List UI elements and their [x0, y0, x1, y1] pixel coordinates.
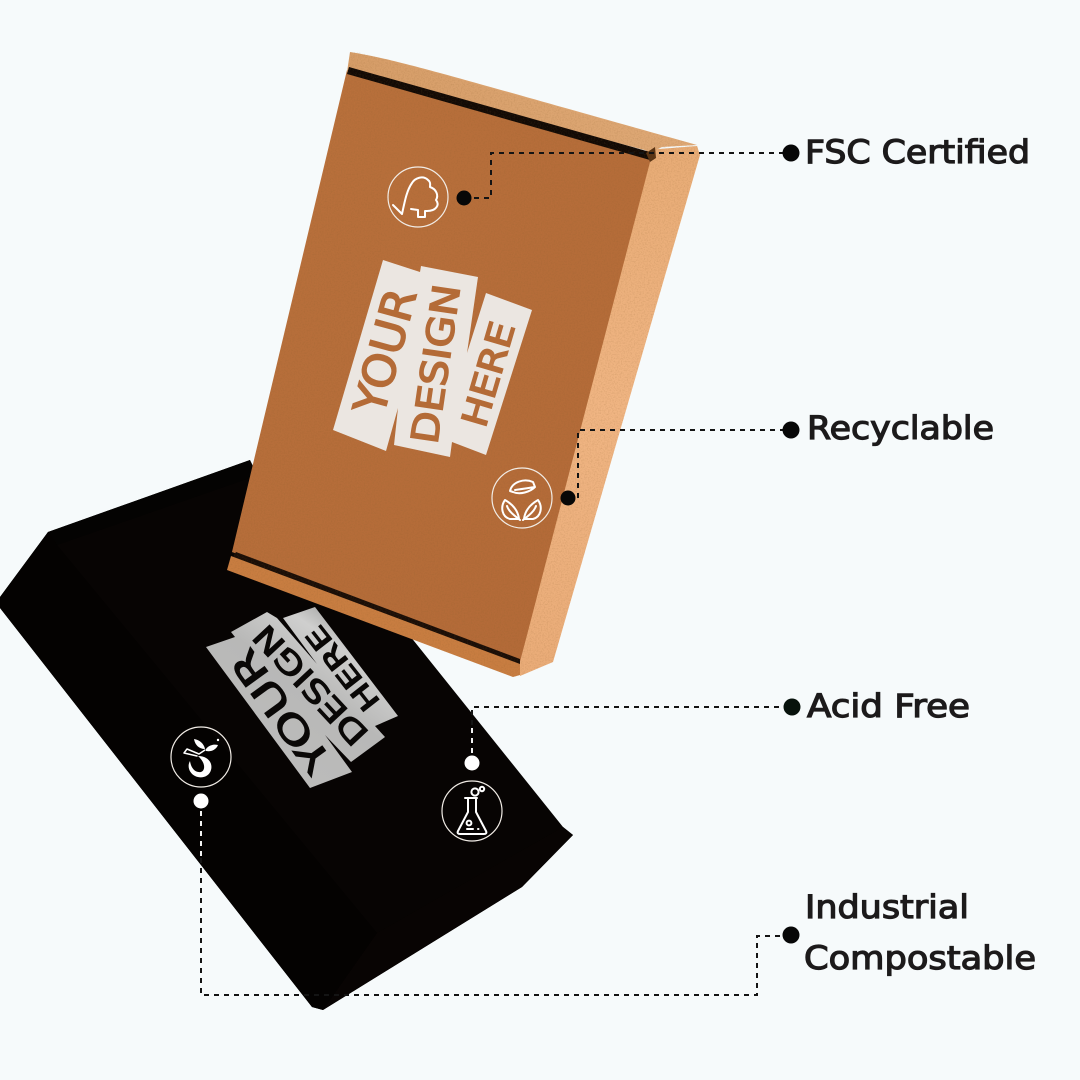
kraft front face: [232, 70, 652, 662]
connector: Recyclable: [568, 430, 791, 498]
kraft side panel: [520, 146, 700, 676]
black box body: [0, 460, 573, 1010]
label: FSC Certified: FSC Certified: [805, 133, 1030, 171]
kraft text design: DESIGN: [403, 282, 469, 446]
icon: recycled leaves: [492, 468, 552, 528]
icon: flask: [442, 781, 502, 841]
icon: FSC tree: [388, 167, 448, 227]
black box text here: HERE: [301, 619, 387, 717]
label: Acid Free: Acid Free: [807, 687, 970, 725]
kraft printed patch: [333, 260, 532, 457]
label: Industrial Compostable: Industrial: [805, 888, 969, 926]
connector: Industrial Compostable: [201, 858, 791, 995]
black box text design: DESIGN: [247, 617, 376, 752]
black box lid top flap: [48, 460, 250, 545]
connector: Industrial Compostable white segment: [200, 801, 202, 856]
kraft text here: HERE: [455, 318, 524, 432]
icon: seedling compostable: [171, 727, 231, 787]
kraft top slit: [347, 67, 650, 160]
black box: [0, 460, 573, 1010]
kraft top flap: [347, 52, 697, 152]
kraft box: [220, 50, 710, 690]
marker dots: [194, 144, 800, 944]
kraft bottom flap: [227, 556, 520, 677]
black box printed patch: [206, 607, 398, 788]
kraft grain: [220, 50, 710, 690]
kraft corner fold: [646, 147, 656, 162]
connector: FSC Certified: [464, 153, 791, 198]
connector: Acid Free white segment: [471, 728, 473, 763]
kraft bottom slit: [233, 552, 520, 666]
connector: Acid Free: [472, 707, 792, 725]
kraft text your: YOUR: [344, 283, 427, 421]
black box bottom flap: [323, 827, 573, 1010]
label: Recyclable: Recyclable: [807, 409, 994, 447]
black box text your: YOUR: [222, 641, 341, 782]
label: Industrial Compostable: Compostable: [804, 939, 1036, 977]
label: Industrial Compostable: [804, 888, 1036, 977]
black box left side: [0, 532, 377, 1010]
